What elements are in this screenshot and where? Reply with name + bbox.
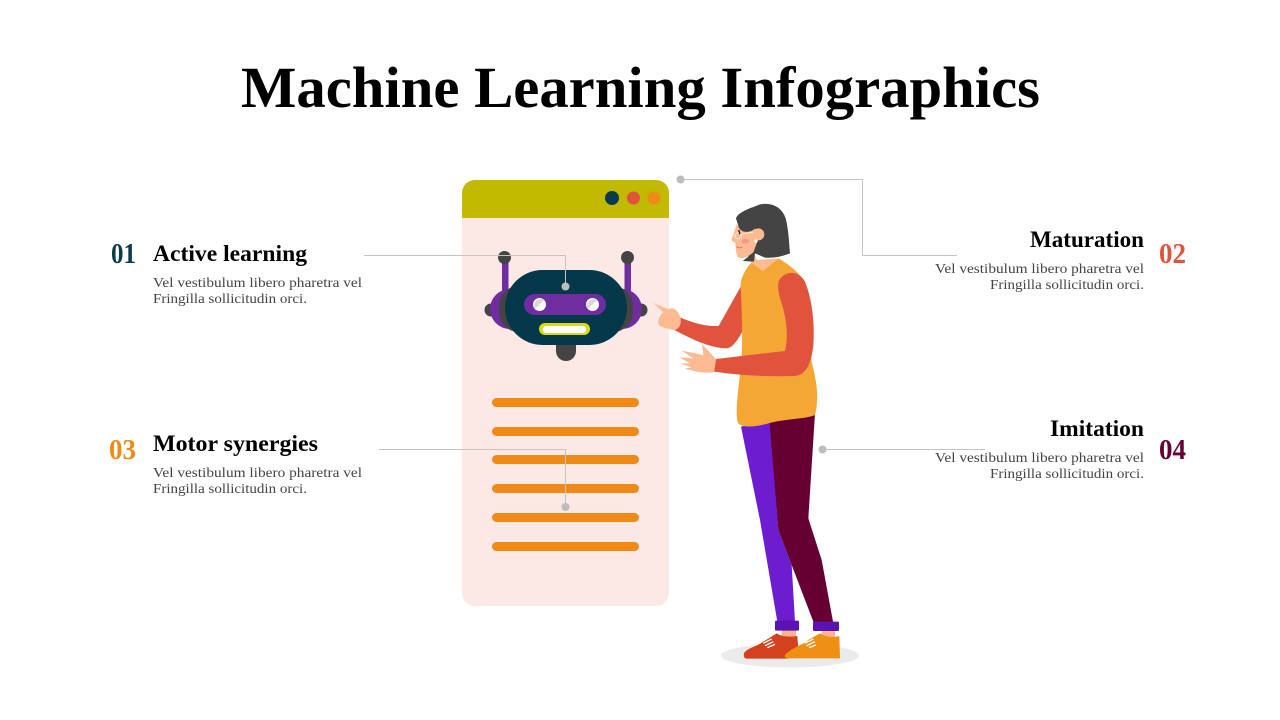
callout 03: Motor synergies [109, 431, 362, 497]
icon: robot head [484, 251, 648, 361]
callout 01: Active learning: 01 [111, 239, 136, 270]
callout 02: Maturation [935, 227, 1186, 293]
window header bar [462, 180, 669, 218]
illustration: standing woman [653, 204, 859, 668]
callout 04: Imitation: Vel vestibulum libero pharetra vel [935, 451, 1144, 466]
callout 04: Imitation: Fringilla sollicitudin orci. [990, 467, 1144, 482]
text placeholder lines [492, 398, 639, 551]
connector dots [562, 176, 826, 511]
title: Machine Learning Infographics [241, 55, 1040, 120]
callout 03: Motor synergies: Vel vestibulum libero pharetra vel [153, 466, 362, 481]
callout 02: Maturation: Maturation [1030, 227, 1144, 253]
callout 01: Active learning [111, 239, 362, 307]
callout 01: Active learning: Vel vestibulum libero pharetra vel [153, 276, 362, 291]
window control dots [605, 191, 660, 205]
callout 02: Maturation: 02 [1159, 239, 1186, 270]
floor shadow [721, 644, 859, 668]
callout 04: Imitation: 04 [1159, 435, 1186, 466]
callout 03: Motor synergies: Motor synergies [153, 431, 318, 457]
window body [462, 180, 669, 606]
connector lines [364, 180, 985, 507]
callout 02: Maturation: Vel vestibulum libero pharetra vel [935, 262, 1144, 277]
torso, arms and head [653, 204, 817, 426]
callout 01: Active learning: Active learning [153, 241, 307, 267]
callout 04: Imitation: Imitation [1050, 416, 1144, 442]
callout 02: Maturation: Fringilla sollicitudin orci. [990, 278, 1144, 293]
callout 03: Motor synergies: Fringilla sollicitudin orci. [153, 482, 307, 497]
legs and shoes [741, 413, 840, 659]
panel: app window [462, 180, 669, 606]
callout 04: Imitation [935, 416, 1186, 482]
callout 03: Motor synergies: 03 [109, 435, 136, 466]
callout 01: Active learning: Fringilla sollicitudin orci. [153, 292, 307, 307]
